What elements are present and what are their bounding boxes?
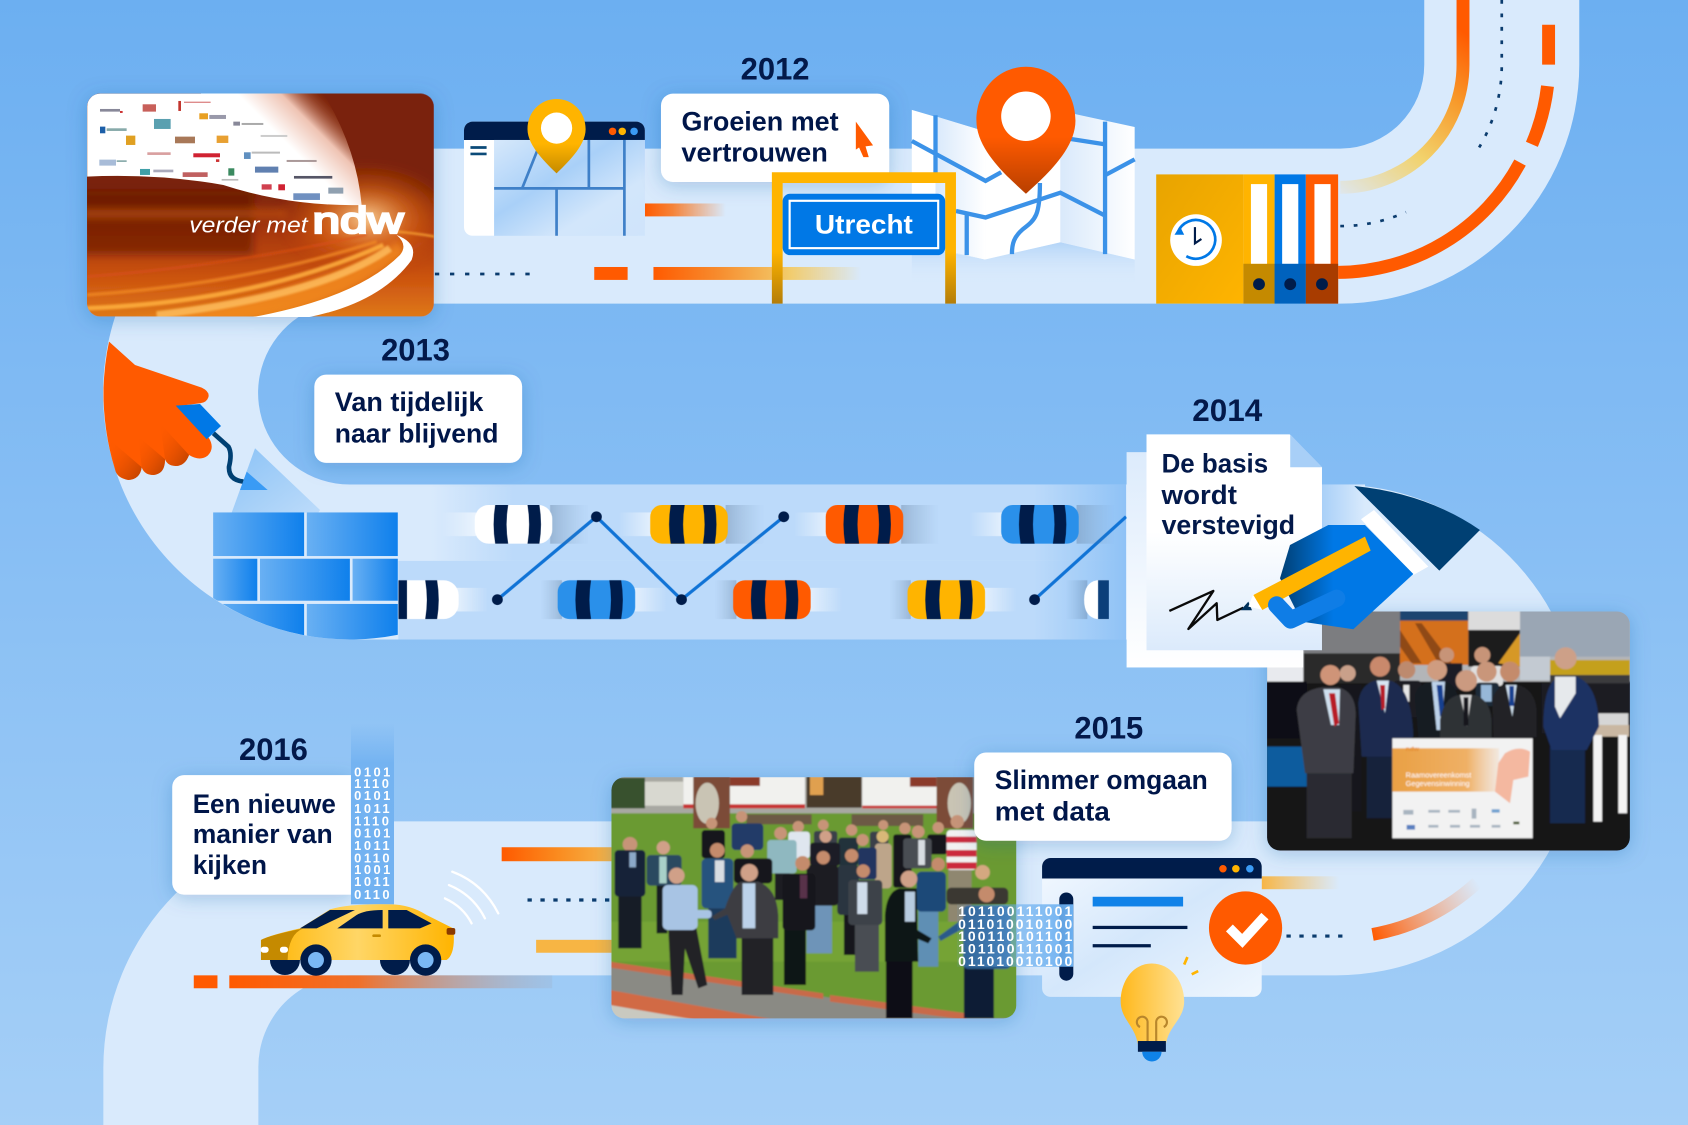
sign: Utrecht xyxy=(772,172,956,304)
card: 2012 xyxy=(661,52,889,182)
card: 2015 xyxy=(974,711,1232,841)
text 2014: verstevigd xyxy=(1162,510,1295,540)
text box 2013: naar blijvend xyxy=(335,418,498,448)
data column: 0101 xyxy=(354,826,393,841)
car: white bottom xyxy=(398,580,489,619)
text box 2013: Van tijdelijk xyxy=(335,387,483,417)
text box 2012 xyxy=(661,94,889,182)
text box 2012: Groeien met xyxy=(681,106,839,136)
card: 2013 xyxy=(314,333,522,463)
orange yellow bar xyxy=(502,847,611,861)
icon: cursor xyxy=(856,122,873,157)
icon: clock xyxy=(1170,214,1222,266)
lower route markings xyxy=(194,847,1477,988)
icon: brick wall xyxy=(213,512,398,639)
icon: orange location pin xyxy=(976,67,1075,194)
overlay: binary data: 101100111001 xyxy=(958,940,1072,956)
slogan: verder met xyxy=(189,213,309,238)
overlay: binary data: 100110101101 xyxy=(958,928,1072,944)
overlay: binary data: 101100111001 xyxy=(958,903,1072,919)
data column: 0101 xyxy=(354,765,393,780)
car: yellow top xyxy=(618,505,764,544)
yellow bar xyxy=(536,940,611,953)
data column: 1110 xyxy=(354,814,391,829)
icon: light bulb xyxy=(1121,957,1198,1061)
photo: signing group 2014 xyxy=(1265,610,1635,855)
chart: zigzag line xyxy=(492,511,1126,605)
car: blue bottom xyxy=(540,580,667,619)
orange road dash xyxy=(594,267,628,280)
year 2015: 2015 xyxy=(1074,711,1143,746)
photo: group on lawn 2015 xyxy=(610,775,1020,1020)
car: yellow bottom xyxy=(889,580,1017,619)
text box 2013 xyxy=(314,375,522,463)
icon: browser checklist xyxy=(1042,858,1282,997)
text 2014: wordt xyxy=(1161,480,1237,510)
car: partial at paper xyxy=(1066,580,1109,619)
back sheet xyxy=(1127,452,1303,667)
front sheet xyxy=(1147,434,1322,650)
overlay: binary data: 011010010100 xyxy=(958,953,1072,969)
text box 2016: kijken xyxy=(193,850,267,880)
signed board: Gegevensinwinning xyxy=(1406,779,1470,788)
sheet fold xyxy=(1290,434,1322,467)
signed board xyxy=(1392,738,1533,838)
data column: 1011 xyxy=(354,801,392,816)
year 2013: 2013 xyxy=(381,333,450,368)
dotted line left xyxy=(528,898,611,901)
icon: yellow location pin xyxy=(528,99,586,173)
dotted line xyxy=(435,273,533,275)
orange road bar xyxy=(653,267,861,280)
text box 2016: Een nieuwe xyxy=(193,789,336,819)
icon: binders with clock xyxy=(1156,174,1338,304)
year 2016: 2016 xyxy=(239,732,308,767)
data column: 1011 xyxy=(354,874,392,889)
route markings top right xyxy=(1338,0,1549,272)
orange fading bar xyxy=(645,203,726,216)
overlay: binary data: 011010010100 xyxy=(958,916,1072,932)
card: 2016 xyxy=(172,723,394,904)
orange dash xyxy=(194,975,217,988)
photo card: verder met ndw xyxy=(80,93,457,325)
car body xyxy=(261,904,455,976)
yellow fading bar xyxy=(1262,876,1339,889)
icon: yellow car xyxy=(261,872,498,976)
data column: 0110 xyxy=(354,887,392,902)
dotted line xyxy=(1286,935,1346,938)
car: orange bottom xyxy=(715,580,843,619)
text 2014: De basis xyxy=(1162,449,1268,479)
text box 2012: vertrouwen xyxy=(681,137,828,167)
signed board: Raamovereenkomst xyxy=(1406,770,1471,779)
orange road line xyxy=(229,975,552,988)
signed board: ndw xyxy=(1406,746,1420,753)
text box 2015: Slimmer omgaan xyxy=(995,765,1208,795)
data column: 1011 xyxy=(354,838,392,853)
table xyxy=(1593,713,1629,822)
cars top view xyxy=(398,505,1115,619)
car: blue top xyxy=(969,505,1115,544)
document: 2014 xyxy=(1127,393,1480,667)
year 2014: 2014 xyxy=(1192,393,1263,428)
orange fading arc xyxy=(1373,883,1477,934)
data column: 1001 xyxy=(354,862,393,877)
light streaks xyxy=(87,166,434,316)
text box 2016: manier van xyxy=(193,819,333,849)
year 2012: 2012 xyxy=(741,52,810,87)
logos xyxy=(99,101,343,200)
icon: check mark xyxy=(1209,891,1282,965)
overlay: binary data xyxy=(957,903,1073,969)
route lane overlays xyxy=(398,484,1365,639)
data column: 1110 xyxy=(354,776,391,791)
text box 2016 xyxy=(172,775,352,895)
data column: 0101 xyxy=(354,788,393,803)
car: orange top xyxy=(793,505,940,544)
icon: hand with trowel xyxy=(103,342,320,513)
people xyxy=(615,811,1011,1018)
sign: Utrecht: Utrecht xyxy=(815,210,913,240)
icon: browser with map xyxy=(464,99,645,236)
car: white top xyxy=(441,505,589,544)
signal waves xyxy=(445,872,498,923)
text 2014 xyxy=(1161,449,1295,540)
icon: folded map with pin xyxy=(912,67,1135,282)
ndw logo: ndw xyxy=(313,200,404,241)
icon: pen signature xyxy=(1169,486,1480,629)
text box 2015: met data xyxy=(995,796,1111,826)
text box 2015 xyxy=(974,753,1232,841)
data column xyxy=(351,723,394,904)
people xyxy=(1297,647,1599,838)
data column: 0110 xyxy=(354,850,392,865)
